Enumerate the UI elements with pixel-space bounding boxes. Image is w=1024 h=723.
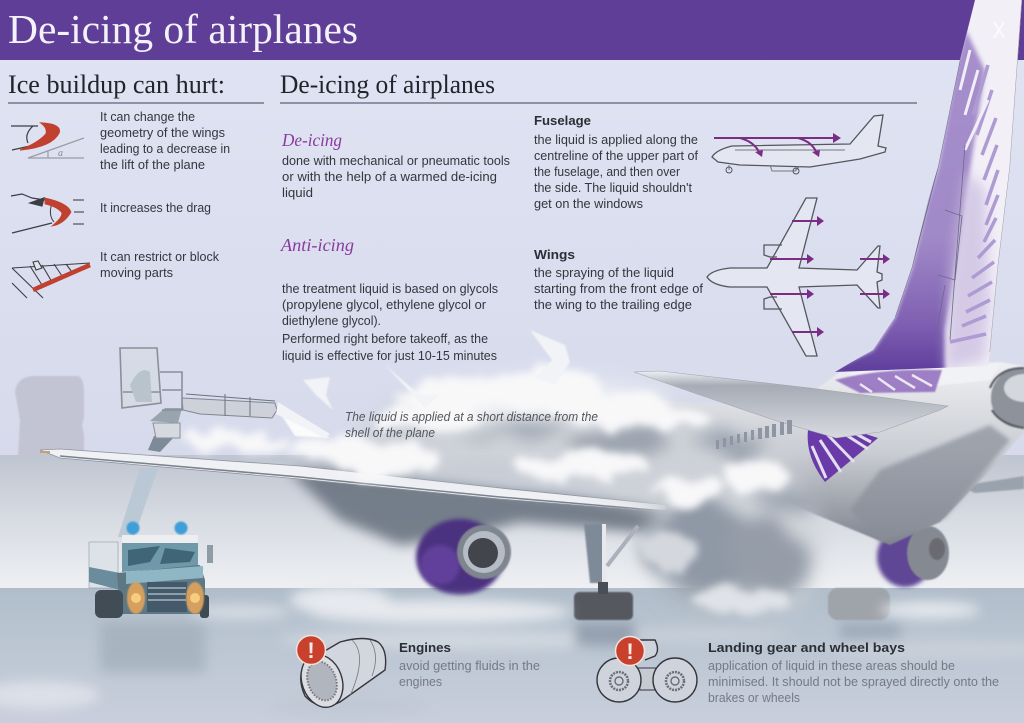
text: landing gear: brakes or wheels bbox=[708, 691, 800, 705]
main landing gear bbox=[574, 524, 638, 620]
background: wet apron bbox=[0, 588, 1024, 723]
text: moving parts: It can restrict or block bbox=[100, 250, 220, 264]
apron reflections bbox=[0, 605, 1024, 717]
text: fuselage: the liquid is applied along the bbox=[534, 133, 698, 147]
spray clouds: white bbox=[185, 368, 790, 612]
text: geometry: geometry of the wings bbox=[100, 126, 225, 140]
text: wings: starting from the front edge of bbox=[534, 282, 704, 296]
aircraft tail fin bbox=[820, 0, 1024, 375]
rear wheels bbox=[828, 588, 890, 620]
text: geometry bbox=[100, 110, 230, 172]
subheading: de-icing: De-icing bbox=[281, 130, 342, 150]
icon: moving parts bbox=[12, 261, 90, 298]
text: anti-icing: Performed right before takeoff, as the bbox=[282, 332, 488, 346]
text: de-icing: or with the help of a warmed de-icing bbox=[282, 170, 497, 184]
title: De-icing of airplanes bbox=[8, 6, 358, 52]
text: moving parts bbox=[100, 250, 220, 280]
heading: landing gear: Landing gear and wheel bays bbox=[708, 640, 905, 655]
text: drag: It increases the drag bbox=[100, 201, 211, 215]
text: wings: the spraying of the liquid bbox=[534, 266, 674, 280]
divider: de-icing bbox=[280, 102, 917, 104]
headlights bbox=[127, 582, 145, 614]
divider: ice buildup bbox=[8, 102, 264, 104]
warning badge: engines: ! bbox=[307, 638, 315, 663]
fin base purple bbox=[835, 370, 942, 393]
warning: engines bbox=[294, 636, 540, 713]
windows bbox=[716, 420, 792, 449]
spray wisps bbox=[278, 330, 570, 438]
background silhouette: distant building bbox=[15, 376, 84, 456]
header band bbox=[0, 0, 1024, 60]
panel: de-icing of airplanes bbox=[280, 70, 917, 363]
icon: engine bbox=[294, 638, 386, 713]
aircraft fuselage bbox=[650, 362, 1024, 545]
text: landing gear: application of liquid in these areas should be bbox=[708, 659, 955, 673]
aircraft near wing bbox=[40, 449, 720, 545]
text: de-icing bbox=[282, 154, 510, 200]
warning badge: engines bbox=[296, 636, 326, 664]
text: geometry: leading to a decrease in bbox=[100, 142, 230, 156]
subheading: fuselage: Fuselage bbox=[534, 113, 591, 128]
subheading: wings: Wings bbox=[534, 247, 575, 262]
fuselage purple emblem bbox=[808, 416, 878, 482]
panel: ice buildup can hurt bbox=[8, 70, 264, 298]
text: fuselage: get on the windows bbox=[534, 197, 643, 211]
subheading: anti-icing: Anti-icing bbox=[280, 235, 354, 255]
icon: drag bbox=[11, 194, 84, 233]
truck body bbox=[89, 542, 118, 588]
warning: landing gear bbox=[597, 636, 999, 705]
text: engines bbox=[399, 659, 540, 689]
heading: ice buildup: Ice buildup can hurt: bbox=[8, 70, 225, 99]
spray clouds: grey bbox=[460, 424, 824, 590]
beacons bbox=[126, 522, 140, 534]
annotation: liquid distance: The liquid is applied at a short distance from the bbox=[345, 410, 598, 424]
text: landing gear: minimised. It should not be sprayed directly onto the bbox=[708, 675, 999, 689]
aircraft rear engine bbox=[877, 526, 949, 587]
text: moving parts: moving parts bbox=[100, 266, 173, 280]
icon: wing geometry: a bbox=[58, 148, 63, 159]
text: de-icing: liquid bbox=[282, 186, 313, 200]
diagram: wings top view bbox=[707, 198, 890, 356]
shadow under wing bbox=[290, 470, 720, 545]
text: anti-icing: diethylene glycol). bbox=[282, 314, 381, 328]
text: wings: the wing to the trailing edge bbox=[534, 298, 692, 312]
text: wings bbox=[534, 266, 704, 312]
ground spray haze bbox=[290, 586, 980, 624]
spray clouds: soft base bbox=[340, 383, 820, 612]
annotation: liquid distance: shell of the plane bbox=[345, 426, 435, 440]
heading: de-icing: De-icing of airplanes bbox=[280, 70, 495, 99]
tail cone bbox=[990, 368, 1024, 428]
boom bbox=[118, 394, 330, 537]
icon: wheels bbox=[597, 640, 697, 702]
text: fuselage: centreline of the upper part of bbox=[534, 149, 699, 163]
icon: wing geometry bbox=[11, 123, 84, 159]
warning badge: landing gear bbox=[616, 636, 644, 666]
text: anti-icing: the treatment liquid is based on glycols bbox=[282, 282, 498, 296]
cabin bbox=[120, 348, 182, 410]
text: engines: avoid getting fluids in the bbox=[399, 659, 540, 673]
background: sky bbox=[0, 0, 1024, 456]
text: de-icing: done with mechanical or pneumatic tools bbox=[282, 154, 510, 168]
text: anti-icing: (propylene glycol, ethylene glycol or bbox=[282, 298, 486, 312]
main engine bbox=[416, 519, 511, 595]
de-icing vehicle bbox=[89, 348, 330, 618]
text: fuselage bbox=[534, 133, 699, 211]
aircraft horizontal stabilizer bbox=[634, 371, 948, 438]
text: landing gear bbox=[708, 659, 999, 705]
background: airport haze bbox=[0, 455, 1024, 589]
text: geometry: It can change the bbox=[100, 110, 195, 124]
warning badge: landing gear: ! bbox=[626, 639, 634, 664]
text: anti-icing: liquid is effective for just 10-15 minutes bbox=[282, 349, 497, 363]
aircraft far wing bbox=[960, 476, 1024, 493]
text: fuselage: the fuselage, and then over bbox=[534, 165, 680, 179]
text: engines: engines bbox=[399, 675, 442, 689]
heading: engines: Engines bbox=[399, 640, 451, 655]
text: geometry: the lift of the plane bbox=[100, 158, 205, 172]
text: fuselage: the side. The liquid shouldn't bbox=[534, 181, 693, 195]
diagram: fuselage side view bbox=[712, 115, 886, 174]
text: anti-icing bbox=[282, 282, 498, 363]
annotation: liquid distance bbox=[345, 410, 598, 440]
